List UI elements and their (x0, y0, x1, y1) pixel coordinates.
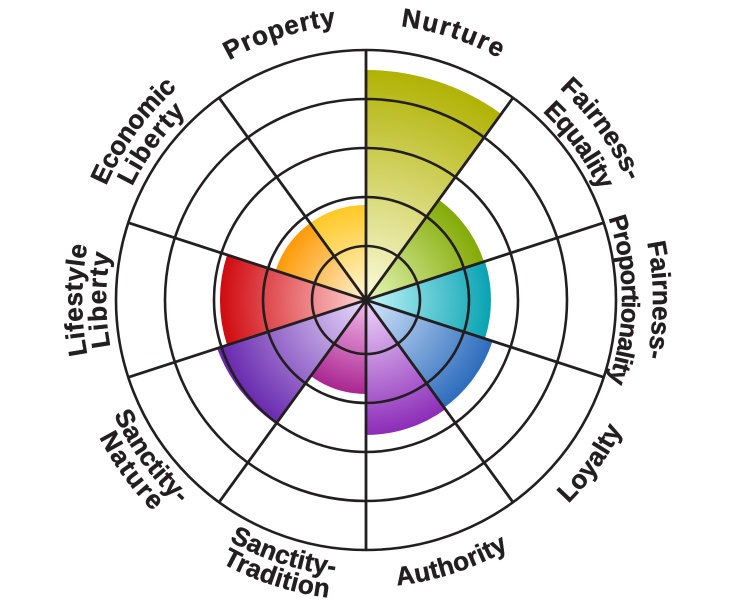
label: Sanctity-Tradition: Sanctity- (232, 527, 336, 578)
sector: Property (310, 205, 366, 300)
label: Fairness-Proportionality (606, 214, 672, 386)
polar grid: rings and spokes (116, 50, 616, 550)
label: Nurture: Nurture (402, 8, 503, 56)
label: Fairness-Equality: Equality (544, 100, 612, 186)
label: Sanctity-Nature: Nature (100, 430, 160, 509)
label: Fairness-Proportionality: Proportionality (606, 214, 640, 386)
label: Lifestyle Liberty (64, 244, 114, 356)
label: Lifestyle Liberty: Lifestyle (64, 244, 88, 356)
sector: Sanctity-Nature (217, 300, 366, 424)
label: Sanctity-Nature: Sanctity- (116, 409, 184, 500)
label: Economic Liberty: Liberty (116, 102, 184, 186)
sector: Lifestyle Liberty (220, 255, 366, 345)
label: Fairness-Equality: Fairness- (560, 76, 635, 178)
label: Loyalty: Loyalty (556, 422, 622, 503)
sector: Fairness-Equality (366, 200, 484, 300)
label: Authority: Authority (398, 536, 504, 586)
label: Fairness-Proportionality: Fairness- (647, 240, 672, 358)
sector: Loyalty (366, 300, 492, 408)
sector: Nurture (366, 70, 501, 300)
sector: Fairness-Proportionality (366, 261, 491, 339)
label: Economic Liberty: Economic (90, 80, 175, 185)
label: Lifestyle Liberty: Liberty (88, 251, 114, 348)
sector: Sanctity-Tradition (311, 300, 366, 394)
sector: Authority (366, 300, 445, 435)
label: Property: Property (222, 11, 334, 60)
sector: Economic Liberty (276, 223, 366, 300)
